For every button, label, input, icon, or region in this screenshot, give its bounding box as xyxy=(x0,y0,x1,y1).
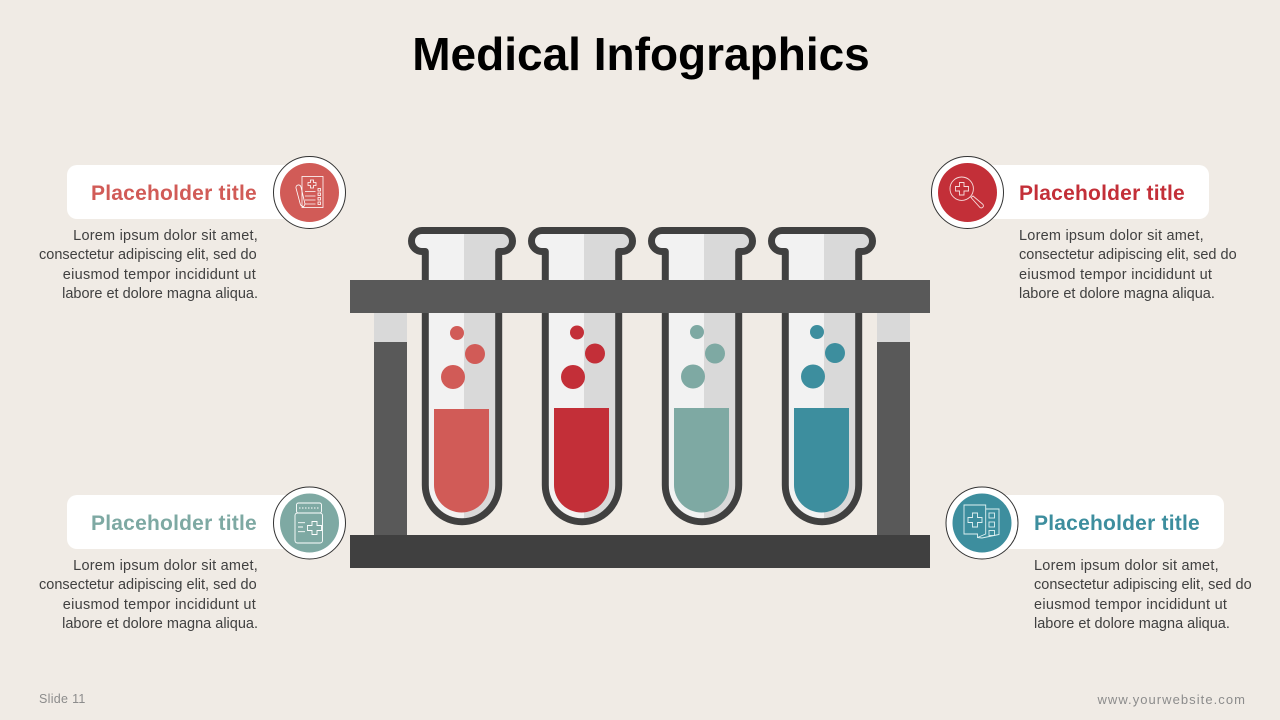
icon: medical report xyxy=(274,156,346,228)
left rack leg xyxy=(374,313,407,535)
text block: top-left xyxy=(39,228,258,302)
test tube 2 xyxy=(528,227,636,526)
footer: website: www.yourwebsite.com xyxy=(1097,692,1246,707)
panel: bottom-right card xyxy=(1006,495,1252,632)
test tube 1 xyxy=(408,227,516,526)
rack top bar xyxy=(350,280,930,313)
test tube 4 xyxy=(768,227,876,526)
right rack leg xyxy=(877,313,910,535)
heading bar: top-right xyxy=(968,165,1209,219)
heading bar: bottom-right: Placeholder title xyxy=(1034,512,1200,535)
text block: bottom-left: consectetur adipiscing elit, sed do xyxy=(39,577,257,593)
text block: bottom-right xyxy=(1034,558,1252,632)
icon: medical leaflet and pills xyxy=(946,487,1018,559)
heading bar: bottom-left: Placeholder title xyxy=(91,512,257,535)
panel: top-right card xyxy=(992,165,1237,302)
text block: bottom-right: consectetur adipiscing elit, sed do xyxy=(1034,577,1252,593)
panel: bottom-left card xyxy=(39,495,286,632)
icon: medicine bottle xyxy=(274,487,346,559)
text block: bottom-right: eiusmod tempor incididunt ut xyxy=(1034,597,1227,613)
heading bar: bottom-right xyxy=(983,495,1224,549)
text block: bottom-left: labore et dolore magna aliqua. xyxy=(62,616,258,632)
test tube 3 xyxy=(648,227,756,526)
footer: slide number: Slide 11 xyxy=(39,692,86,706)
title: Medical Infographics xyxy=(412,28,870,80)
text block: bottom-right: Lorem ipsum dolor sit amet, xyxy=(1034,558,1219,574)
text block: top-left: eiusmod tempor incididunt ut xyxy=(63,267,256,283)
text block: bottom-left: Lorem ipsum dolor sit amet, xyxy=(73,558,258,574)
heading bar: top-left xyxy=(67,165,307,219)
icon: magnifier with cross xyxy=(932,156,1004,228)
heading bar: bottom-left xyxy=(67,495,307,549)
text block: top-left: consectetur adipiscing elit, sed do xyxy=(39,247,257,263)
text block: bottom-right: labore et dolore magna aliqua. xyxy=(1034,616,1230,632)
heading bar: top-right: Placeholder title xyxy=(1019,182,1185,205)
text block: top-right: consectetur adipiscing elit, sed do xyxy=(1019,247,1237,263)
text block: top-right: Lorem ipsum dolor sit amet, xyxy=(1019,228,1204,244)
text block: top-left: labore et dolore magna aliqua. xyxy=(62,286,258,302)
text block: top-right: eiusmod tempor incididunt ut xyxy=(1019,267,1212,283)
heading bar: top-left: Placeholder title xyxy=(91,182,257,205)
text block: bottom-left xyxy=(39,558,258,632)
test tube rack xyxy=(350,223,930,568)
rack base xyxy=(350,535,930,568)
text block: bottom-left: eiusmod tempor incididunt ut xyxy=(63,597,256,613)
panel: top-left card xyxy=(39,165,286,302)
text block: top-right xyxy=(1019,228,1237,302)
text block: top-right: labore et dolore magna aliqua. xyxy=(1019,286,1215,302)
text block: top-left: Lorem ipsum dolor sit amet, xyxy=(73,228,258,244)
